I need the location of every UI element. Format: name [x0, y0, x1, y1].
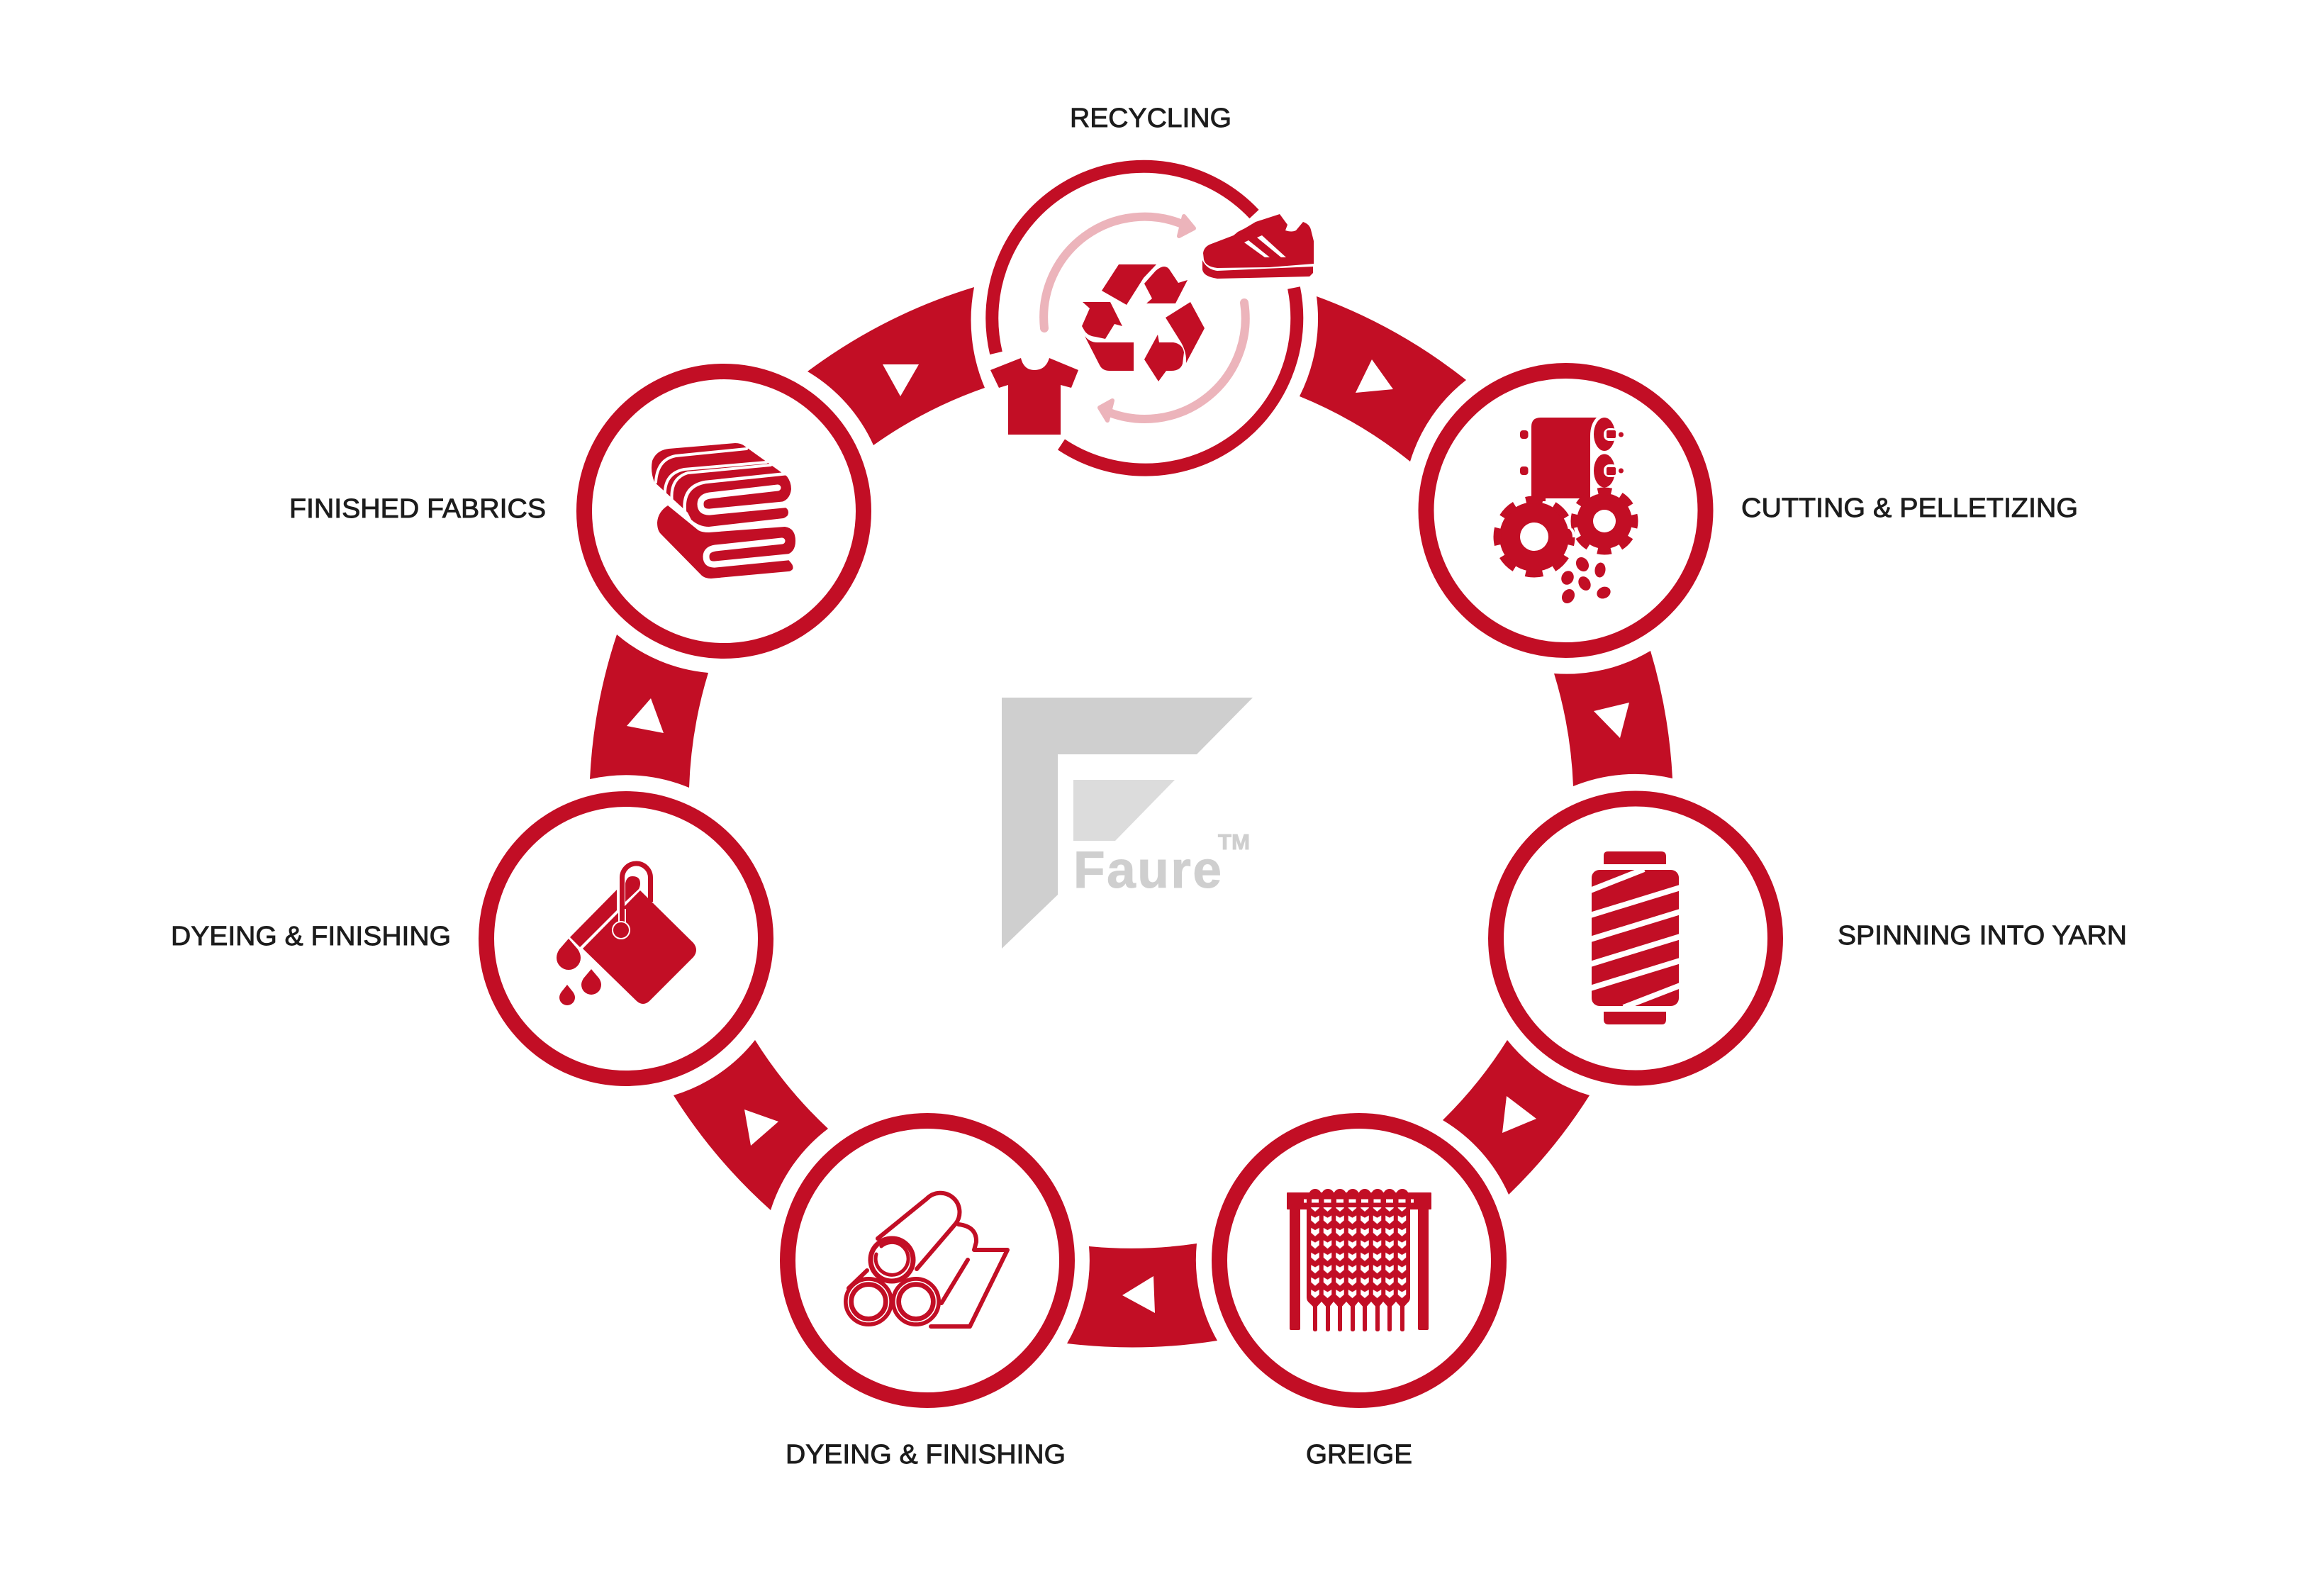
center logo: Faure: [1073, 842, 1222, 899]
arrow segment: dyeing to finished: [590, 635, 708, 788]
arrow segment: spinning to greige: [1443, 1040, 1590, 1195]
center logo: [1002, 698, 1253, 949]
label: dyeing and finishing left: DYEING & FINISHING: [171, 922, 451, 951]
center logo: TM: [1218, 829, 1250, 854]
node: finished fabrics: [584, 371, 864, 651]
arrow segment: cutting to spinning: [1554, 651, 1672, 786]
arrow segment: greige to dyeing: [1067, 1244, 1217, 1348]
arrow segment: recycling to cutting: [1300, 296, 1466, 462]
node: dyeing and finishing, fabric rolls: [788, 1121, 1067, 1400]
label: dyeing and finishing bottom: DYEING & FINISHING: [786, 1440, 1066, 1470]
arrow segment: dyeing to dyeing: [674, 1040, 828, 1210]
label: cutting and pelletizing: CUTTING & PELLETIZING: [1741, 493, 2078, 523]
icon: sneaker: [1202, 214, 1314, 279]
label: greige: GREIGE: [1306, 1440, 1412, 1470]
label: finished fabrics: FINISHED FABRICS: [289, 494, 546, 524]
label: recycling: RECYCLING: [1070, 104, 1231, 133]
arrow segment: finished to recycling: [808, 287, 985, 445]
icon: t-shirt: [990, 358, 1078, 435]
node: dyeing and finishing, paint bucket: [486, 799, 766, 1078]
label: spinning into yarn: SPINNING INTO YARN: [1838, 921, 2127, 951]
node: recycling: [990, 167, 1314, 470]
node: greige: [1219, 1121, 1499, 1400]
node: cutting and pelletizing: [1426, 371, 1706, 650]
node: spinning into yarn: [1496, 798, 1775, 1078]
